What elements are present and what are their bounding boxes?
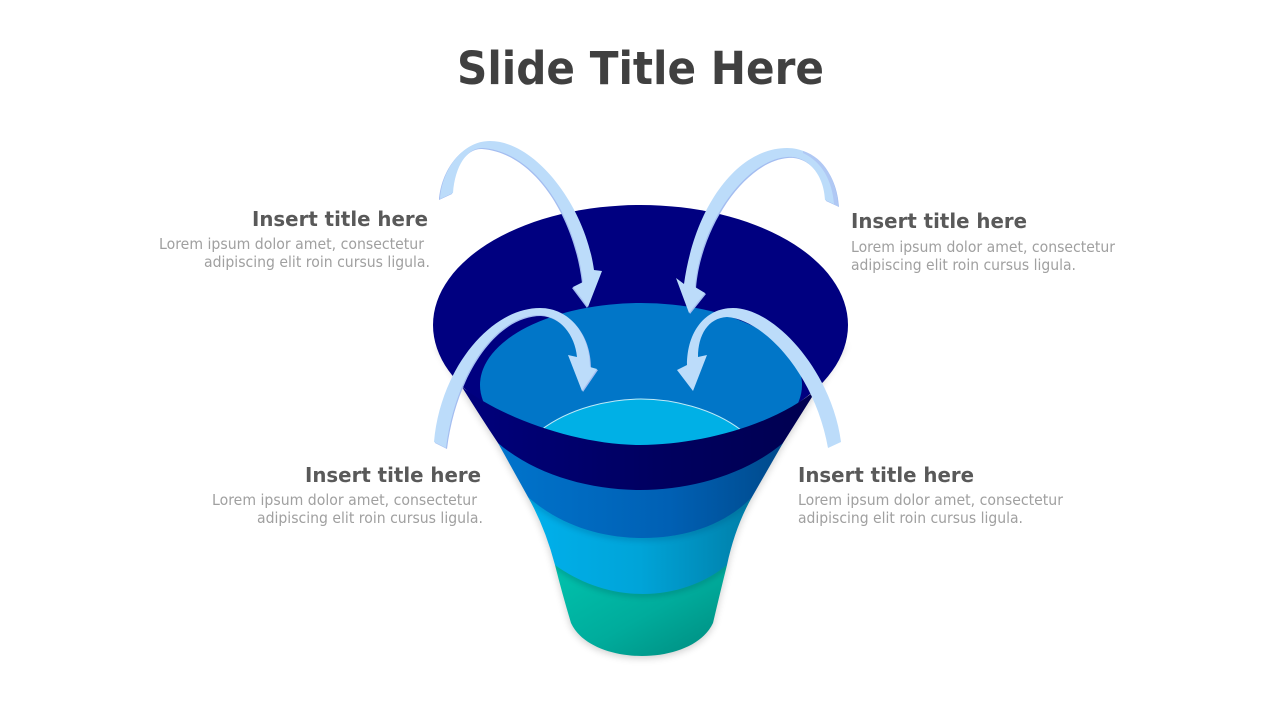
funnel tier 4: teal [555, 558, 727, 656]
teal tier inner shade [555, 565, 727, 594]
funnel mouth: navy ellipse [433, 205, 848, 445]
text block: top left: adipiscing elit roin cursus ligula. [204, 253, 430, 271]
arrow: lower right [677, 308, 841, 448]
inner cyan surface [541, 399, 741, 455]
text block: lower right: Lorem ipsum dolor amet, consectetur [798, 491, 1064, 509]
text block: top left: Insert title here [252, 207, 428, 231]
inner blue ellipse [480, 303, 802, 467]
text block: lower left: Lorem ipsum dolor amet, consectetur [212, 491, 478, 509]
funnel [433, 205, 848, 658]
text block: top left [159, 207, 430, 271]
title: Slide Title Here [457, 42, 824, 95]
arrow: lower left [434, 308, 598, 449]
text block: top right: Insert title here [851, 209, 1027, 233]
arrow: top right [676, 148, 839, 314]
funnel tier 1: navy band [462, 387, 817, 490]
text block: lower left: Insert title here [305, 463, 481, 487]
arrow: top left [439, 141, 602, 308]
text block: lower right [798, 463, 1064, 527]
text block: top right: Lorem ipsum dolor amet, consectetur [851, 238, 1116, 256]
funnel shadow [436, 345, 846, 658]
funnel tier 3: cyan [528, 492, 752, 594]
text block: top right: adipiscing elit roin cursus ligula. [851, 256, 1076, 274]
text block: lower right: Insert title here [798, 463, 974, 487]
text block: top right [851, 209, 1116, 274]
cyan tier inner shade [528, 497, 752, 538]
text block: lower left: adipiscing elit roin cursus ligula. [257, 509, 483, 527]
text block: lower right: adipiscing elit roin cursus ligula. [798, 509, 1023, 527]
text block: lower left [212, 463, 483, 527]
funnel tier 2: blue [498, 438, 783, 538]
text block: top left: Lorem ipsum dolor amet, consectetur [159, 235, 425, 253]
